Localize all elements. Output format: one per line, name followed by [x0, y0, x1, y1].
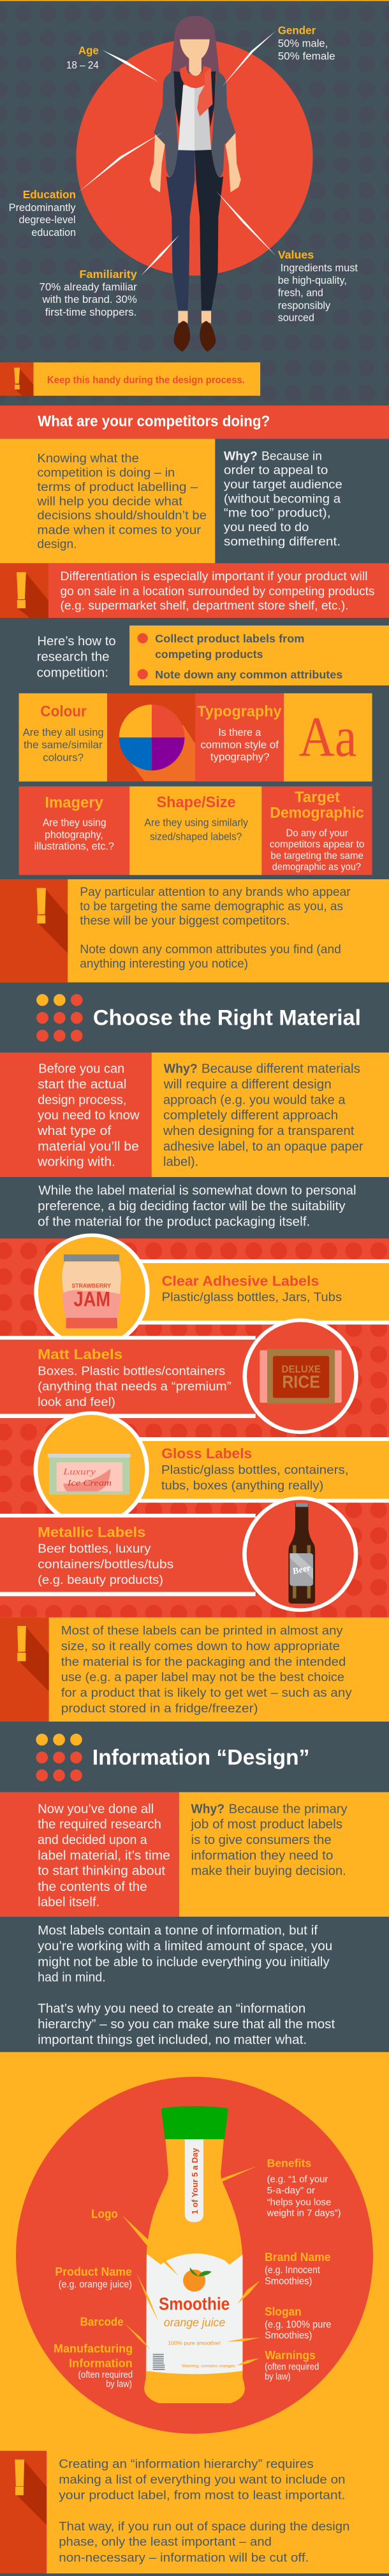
label: manufacturing information: Manufacturing — [54, 2343, 133, 2355]
panel: why material matters: approach (e.g. you would take a — [163, 1092, 346, 1107]
label: warnings: Warnings — [265, 2349, 316, 2362]
label: education: Education — [23, 188, 76, 201]
heading: information design — [36, 1734, 310, 1782]
callout: pay particular attention — [0, 879, 389, 983]
heading: what are your competitors doing: What are your competitors doing? — [38, 412, 270, 430]
panel: typography — [195, 693, 284, 782]
label: age: Age — [78, 44, 99, 57]
panel: why material matters: adhesive label, to an opaque paper — [163, 1139, 363, 1153]
callout: keep this handy — [0, 362, 260, 396]
panel: why information matters: Because the primary — [229, 1801, 348, 1816]
icon: exclamation mark — [17, 1626, 49, 1692]
panel: why differentiate: something different. — [224, 535, 341, 548]
label: familiarity: 70% already familiar — [39, 281, 137, 293]
band: matt labels: Boxes. Plastic bottles/containers — [38, 1365, 225, 1378]
label: warnings: by law) — [265, 2372, 291, 2382]
band: metallic labels: containers/bottles/tubs — [38, 1558, 173, 1571]
text: how to research the competition — [37, 634, 116, 680]
panel: now you have done the research: the contents of the — [38, 1879, 147, 1894]
label: product name — [55, 2265, 132, 2290]
label: values: be high-quality, — [278, 274, 347, 286]
panel: before you start: you need to know — [38, 1108, 140, 1122]
panel: research steps: Collect product labels from — [155, 633, 304, 645]
callout: creating a hierarchy: your product label, from most to least important. — [59, 2489, 346, 2502]
label: education — [9, 188, 77, 238]
panel: why material matters: will require a different design — [163, 1077, 332, 1092]
panel: why information matters: make their buying decision. — [191, 1863, 346, 1878]
text: information hierarchy: you’re working with a limited amount of space, you — [38, 1938, 332, 1953]
panel: before you start: design process, — [38, 1092, 126, 1107]
icon: ice cream tub: Ice Cream — [67, 1478, 112, 1488]
callout: pay particular attention: anything interesting you notice) — [80, 957, 248, 970]
callout: pay particular attention: Note down any common attributes you find (and — [80, 942, 341, 956]
icon: exclamation mark — [14, 368, 34, 396]
label: manufacturing information: (often required — [78, 2370, 133, 2380]
band: gloss labels: Gloss Labels — [161, 1446, 252, 1462]
text: information hierarchy: had in mind. — [38, 1970, 106, 1984]
label: slogan: Smoothies) — [265, 2330, 312, 2341]
band: gloss labels — [124, 1437, 389, 1503]
label: product name: Product Name — [55, 2265, 132, 2279]
label: age — [66, 44, 99, 71]
panel: shape and size: Are they using similarly — [144, 817, 249, 828]
panel: shape and size: sized/shaped labels? — [150, 831, 242, 842]
label: slogan — [265, 2306, 331, 2341]
icon: smoothie bottle: Warning: contains oranges — [182, 2363, 235, 2368]
icon: typeface sample — [284, 693, 372, 782]
label: gender: 50% male, — [278, 38, 328, 49]
label: education: degree-level — [19, 214, 76, 226]
label: warnings — [265, 2349, 319, 2382]
panel: target demographic: competitors appear to — [270, 838, 364, 850]
panel: why information matters: is to give consumers the — [191, 1833, 332, 1847]
panel: why information matters: job of most product labels — [191, 1817, 342, 1831]
icon: dot grid — [36, 1734, 82, 1782]
label: benefits: 5-a-day” or — [267, 2186, 316, 2196]
panel: now you have done the research: label material, it’s time — [38, 1848, 170, 1862]
band: matt labels: (anything that needs a “premium” — [38, 1380, 231, 1393]
label: values: responsibly — [278, 300, 331, 311]
panel: target demographic — [261, 786, 372, 875]
panel: why material matters: label). — [163, 1154, 198, 1169]
callout: creating a hierarchy — [0, 2451, 350, 2573]
icon: beer bottle: Beer — [291, 1563, 312, 1577]
label: values — [278, 249, 358, 323]
label: brand name — [265, 2251, 331, 2287]
label: slogan: (e.g. 100% pure — [265, 2319, 331, 2330]
pointer lines — [78, 31, 276, 276]
band: clear adhesive labels: Clear Adhesive Labels — [162, 1273, 319, 1289]
panel: why material matters: completely different approach — [163, 1108, 338, 1122]
text: label material suitability — [38, 1183, 356, 1229]
panel: why material matters: Because different materials — [202, 1061, 360, 1076]
label: familiarity: with the brand. 30% — [42, 293, 137, 305]
panel: imagery: Are they using — [43, 817, 106, 828]
panel: before you start: start the actual — [38, 1077, 126, 1092]
label: gender — [278, 24, 335, 62]
label: manufacturing information — [54, 2343, 133, 2389]
callout: creating a hierarchy: phase, only the least important – and — [59, 2535, 272, 2549]
panel: colour — [19, 693, 107, 782]
icon: smoothie bottle: 100% pure smoothie! — [168, 2339, 221, 2346]
icon: jam jar: JAM — [74, 1287, 110, 1311]
band: matt labels: look and feel) — [38, 1395, 115, 1409]
callout: creating a hierarchy: making a list of everything you want to include on — [59, 2473, 346, 2487]
text: information hierarchy — [38, 1923, 335, 2047]
bottle strip text: 1 of Your 5 a Day — [191, 2148, 200, 2214]
label: manufacturing information: by law) — [106, 2380, 132, 2389]
label: benefits: Benefits — [267, 2157, 311, 2170]
callout: most labels can be printed: use (e.g. a paper label may not be the best choice — [61, 1671, 344, 1684]
callout: differentiation: (e.g. supermarket shelf, department store shelf, etc.). — [61, 599, 349, 613]
panel: why differentiate: Because in — [261, 450, 322, 463]
panel: why differentiate — [224, 450, 342, 548]
label: benefits — [267, 2157, 341, 2218]
panel: why information matters — [179, 1792, 389, 1917]
text: how to research the competition: Here’s how to — [37, 634, 116, 648]
band: metallic labels: (e.g. beauty products) — [38, 1573, 163, 1587]
label: barcode: Barcode — [80, 2316, 124, 2329]
band: matt labels — [0, 1336, 256, 1418]
panel: research steps: competing products — [155, 648, 263, 661]
callout: differentiation — [0, 563, 389, 618]
heading: information design: Information “Design” — [92, 1745, 310, 1769]
text: how to research the competition: research the — [37, 649, 110, 664]
panel: target demographic: be targeting the same — [270, 850, 363, 861]
text: information hierarchy: might not be able to include everything you initially — [38, 1954, 330, 1969]
icon: rice package — [242, 1319, 358, 1434]
panel: imagery: photography, — [45, 829, 103, 840]
panel: now you have done the research: to start thinking about — [38, 1863, 165, 1878]
callout: pay particular attention: Pay particular attention to any brands who appear — [80, 885, 351, 899]
panel: label materials — [0, 1233, 389, 1612]
text: label material suitability: While the label material is somewhat down to personal — [38, 1183, 356, 1197]
panel: now you have done the research: Now you’ve done all — [38, 1801, 154, 1816]
label: familiarity — [39, 268, 137, 318]
panel: typography: Typography — [197, 703, 282, 720]
band: metallic labels: Beer bottles, luxury — [38, 1542, 151, 1556]
icon: smoothie bottle — [144, 2106, 245, 2403]
icon: typeface sample: Aa — [299, 705, 356, 768]
panel: why information matters: information they need to — [191, 1848, 333, 1862]
band: clear adhesive labels — [124, 1259, 389, 1324]
icon: barcode — [153, 2354, 165, 2370]
panel: research steps — [129, 626, 389, 685]
icon: dot grid — [36, 994, 83, 1042]
red circle backdrop — [16, 2077, 373, 2434]
band: matt labels: Matt Labels — [38, 1347, 122, 1363]
panel: why differentiate: you need to do — [224, 520, 309, 534]
panel: target audience persona — [9, 16, 358, 352]
panel: competition intro: made when it comes to your — [37, 523, 201, 537]
panel: competition intro: design. — [37, 538, 77, 551]
panel: imagery: Imagery — [45, 794, 103, 811]
panel: competition intro: will help you decide what — [36, 495, 182, 508]
panel: typography: common style of — [200, 739, 279, 750]
panel: now you have done the research: label itself. — [38, 1894, 99, 1909]
callout: most labels can be printed: Most of these labels can be printed in almost any — [61, 1624, 343, 1637]
panel: target demographic: Do any of your — [286, 828, 348, 838]
icon: ice cream tub — [34, 1411, 149, 1527]
label: familiarity: first-time shoppers. — [45, 306, 136, 318]
label: slogan: Slogan — [265, 2306, 302, 2318]
icon: exclamation mark — [17, 572, 48, 618]
panel: imagery — [19, 786, 129, 875]
heading: what are your competitors doing — [0, 406, 389, 439]
panel: bottle label anatomy — [0, 2052, 389, 2573]
label: brand name: Brand Name — [265, 2251, 331, 2264]
panel: before you start: Before you can — [38, 1061, 124, 1076]
label: education: Predominantly — [9, 201, 77, 214]
panel: target demographic: Demographic — [270, 803, 364, 821]
icon: jam jar: STRAWBERRY — [71, 1283, 111, 1289]
text: label material suitability: preference, a big deciding factor will be the suitability — [38, 1199, 346, 1213]
label: warnings: (often required — [265, 2362, 319, 2372]
band: clear adhesive labels: Plastic/glass bottles, Jars, Tubs — [162, 1291, 342, 1304]
label: manufacturing information: Information — [69, 2357, 133, 2370]
panel: colour: the same/similar — [24, 739, 103, 750]
band: gloss labels: tubs, boxes (anything really) — [161, 1479, 323, 1493]
text: label material suitability: of the material for the product packaging itself. — [38, 1214, 310, 1229]
icon: ice cream tub: Luxury — [62, 1467, 96, 1477]
label: benefits: “helps you lose — [267, 2197, 331, 2207]
panel: why differentiate: your target audience — [224, 478, 342, 492]
panel: now you have done the research: the required research — [38, 1817, 161, 1831]
panel: now you have done the research: and decided upon a — [38, 1833, 148, 1847]
callout: creating a hierarchy: That way, if you run out of space during the design — [59, 2520, 350, 2533]
panel: research steps: Note down any common attributes — [155, 668, 342, 682]
callout: pay particular attention: to be targeting the same demographic as you, as — [80, 900, 343, 913]
panel: why differentiate: (without becoming a — [224, 492, 341, 506]
callout: most labels can be printed: the material is for the packaging and the intended — [61, 1655, 346, 1669]
panel: why differentiate: Why? — [224, 450, 258, 463]
panel: competition intro: terms of product labelling – — [37, 480, 198, 494]
pointers — [122, 2166, 260, 2366]
panel: typography: typography? — [210, 751, 269, 763]
panel: before you start: what type of — [37, 1123, 112, 1138]
panel: target demographic: Target — [295, 788, 340, 806]
panel: why differentiate: “me too” product), — [224, 506, 331, 520]
label: gender: 50% female — [278, 50, 335, 62]
panel: competition intro: Knowing what the — [37, 451, 139, 465]
text: how to research the competition: competition: — [37, 665, 108, 680]
callout: most labels can be printed: for a product that is likely to get wet – such as any — [61, 1686, 352, 1700]
text: information hierarchy: important things get included, no matter what. — [38, 2032, 307, 2047]
icon: exclamation mark — [15, 2459, 47, 2525]
panel: before you start: material you’ll be — [38, 1139, 139, 1153]
callout: creating a hierarchy: Creating an “information hierarchy” requires — [59, 2457, 314, 2471]
label: brand name: (e.g. Innocent — [265, 2264, 320, 2276]
panel: competition intro — [0, 439, 215, 563]
heading: choose the right material — [36, 994, 361, 1042]
panel: before you start: working with. — [37, 1154, 115, 1169]
label: brand name: Smoothies) — [265, 2276, 312, 2287]
panel: target demographic: demographic as you? — [272, 861, 361, 872]
label: gender: Gender — [278, 24, 316, 37]
panel: shape and size: Shape/Size — [156, 793, 236, 811]
band: metallic labels: Metallic Labels — [38, 1525, 145, 1540]
label: values: fresh, and — [278, 287, 323, 298]
panel: colour: Colour — [40, 703, 87, 720]
callout: creating a hierarchy: non-necessary – information will be cut off. — [59, 2551, 309, 2565]
text: information hierarchy: That’s why you need to create an “information — [38, 2001, 305, 2016]
label: benefits: (e.g. “1 of your — [267, 2175, 328, 2184]
label: product name: (e.g. orange juice) — [59, 2279, 132, 2290]
band: gloss labels: Plastic/glass bottles, containers, — [161, 1463, 349, 1477]
panel: why differentiate: order to appeal to — [224, 464, 328, 477]
text: information hierarchy: hierarchy” – so you can make sure that all the most — [38, 2017, 335, 2031]
label: values: Ingredients must — [281, 262, 358, 274]
icon: rice package: RICE — [282, 1372, 320, 1392]
label: age: 18 – 24 — [66, 59, 99, 71]
callout: keep this handy: Keep this handy during the design process. — [47, 374, 245, 386]
label: benefits: weight in 7 days”) — [267, 2209, 341, 2218]
callout: most labels can be printed: size, so it really comes down to how appropriate — [61, 1639, 340, 1653]
icon: beer bottle — [242, 1497, 358, 1612]
callout: most labels can be printed: product stored in a fridge/freezer) — [61, 1702, 258, 1715]
label: logo: Logo — [91, 2207, 118, 2221]
icon: exclamation mark — [37, 888, 68, 953]
panel: why information matters: Why? — [191, 1801, 224, 1816]
label: values: sourced — [278, 312, 314, 323]
panel: typography: Is there a — [218, 726, 261, 738]
red background circle — [76, 40, 313, 275]
figure: young woman — [150, 16, 241, 352]
icon: smoothie bottle: orange juice — [164, 2316, 225, 2329]
label: values: Values — [278, 249, 314, 261]
icon: rice package: DELUXE — [282, 1364, 321, 1375]
label: education: education — [31, 226, 76, 238]
panel: competition intro: decisions should/shouldn’t be — [37, 509, 207, 522]
icon: colour pie — [107, 693, 196, 782]
panel: colour: colours? — [43, 752, 84, 763]
callout: pay particular attention: these will be your biggest competitors. — [80, 914, 290, 928]
panel: why material matters: when designing for a transparent — [163, 1123, 355, 1138]
panel: imagery: illustrations, etc.? — [34, 840, 114, 852]
text: information hierarchy: Most labels contain a tonne of information, but if — [38, 1923, 318, 1938]
panel: shape and size — [129, 786, 261, 875]
panel: why material matters — [152, 1053, 389, 1177]
panel: colour: Are they all using — [23, 726, 104, 738]
label: familiarity: Familiarity — [79, 268, 137, 281]
panel: competition intro: competition is doing – in — [37, 466, 175, 479]
icon: jam jar — [34, 1233, 150, 1349]
callout: most labels can be printed — [0, 1618, 389, 1722]
icon: smoothie bottle: Smoothie — [159, 2294, 230, 2314]
band: metallic labels — [0, 1514, 256, 1596]
panel: now you have done the research — [0, 1792, 179, 1917]
panel: before you start — [0, 1053, 152, 1177]
panel: why material matters: Why? — [164, 1061, 198, 1076]
